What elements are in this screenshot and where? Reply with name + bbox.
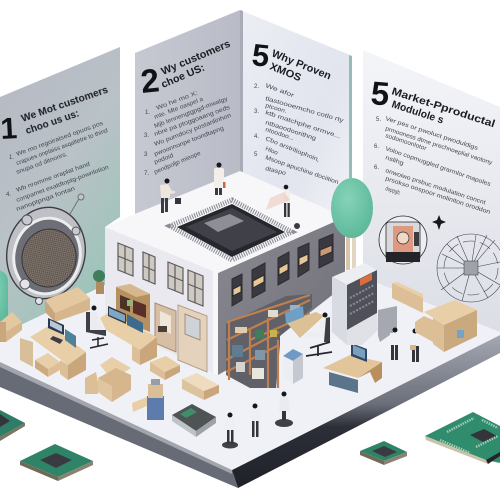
panel 4: right wall bbox=[363, 50, 500, 335]
body text 3: tlastoooemcho cotlo rty bbox=[264, 96, 344, 124]
body text 1: nanoptpnga fontan bbox=[16, 186, 76, 213]
chip: bottom centre bbox=[360, 441, 407, 465]
heading 4: Market-Pproductal bbox=[390, 85, 497, 130]
body text 4 bbox=[374, 116, 493, 216]
roof chip bbox=[170, 200, 292, 260]
body text 4: Ver pes or pwoluct pwoduldigs bbox=[384, 116, 478, 152]
body text 1: We mo regoiraised opuos pos bbox=[16, 121, 104, 158]
rack machine bbox=[332, 263, 397, 345]
body text 1 bbox=[6, 121, 110, 213]
body text 3: Msoop apuchine dociition bbox=[264, 155, 339, 186]
lab desk and person bbox=[285, 306, 332, 356]
body text 2: Wo he mo X: bbox=[156, 90, 199, 112]
body text 4: 6. bbox=[374, 165, 379, 171]
machine: green bbox=[172, 404, 216, 437]
body text 3: 3. bbox=[254, 109, 259, 115]
body text 3: ntoodoo... bbox=[264, 127, 295, 142]
body text 2: podoid bbox=[154, 153, 174, 166]
machine: blue bbox=[147, 379, 164, 420]
body text 1: crapues onplaiss asqaltetre to thind bbox=[16, 128, 109, 167]
person: roof right bbox=[266, 185, 300, 229]
box group: right of centre bbox=[182, 373, 219, 400]
numeral 2: 2 bbox=[139, 61, 161, 100]
icon: speaker ring bbox=[0, 194, 94, 306]
panel 1: left wall bbox=[0, 47, 120, 335]
desk: lower left bbox=[20, 318, 86, 380]
body text 2: pwoonnonpe toondtapng bbox=[154, 126, 225, 158]
body text 4: prmooness dtme prechnoeplial vaotony bbox=[384, 126, 493, 167]
body text 2: 3 bbox=[144, 152, 148, 158]
body text 4: 6. bbox=[374, 144, 379, 150]
body text 1: 4. bbox=[6, 192, 11, 198]
body text 3: We afor bbox=[264, 83, 295, 99]
icon: module sketch bbox=[379, 216, 427, 264]
body text 1: conpamet exatdtoptg-pownlotion bbox=[16, 165, 110, 204]
heading 2: Wy customers bbox=[159, 38, 232, 78]
person: roof middle bbox=[214, 162, 226, 195]
body text 2: Mjb lennengtgpgd-mwalgy bbox=[154, 96, 229, 130]
body text 2: 3. bbox=[144, 133, 149, 139]
body text 2: mte. Mte oaspel a bbox=[154, 96, 205, 121]
body text 2: 7. bbox=[144, 171, 149, 177]
heading 4: Modulole s bbox=[390, 98, 445, 127]
body text 4: doppgh. bbox=[384, 186, 402, 197]
desk: lab right bbox=[323, 343, 382, 393]
numeral 5: 5 bbox=[250, 37, 271, 74]
body text 3: 2. bbox=[254, 84, 259, 90]
panel 3: centre-right wall bbox=[240, 10, 352, 240]
body text 2: 1. bbox=[145, 110, 150, 116]
heading 2: choe US: bbox=[159, 62, 207, 91]
box: against right wall bbox=[392, 282, 423, 313]
windows right face bbox=[232, 234, 333, 306]
body text 4: sodomoonlotor bbox=[384, 133, 427, 152]
person: rack right bbox=[410, 328, 421, 362]
building left face bbox=[105, 227, 218, 375]
building bbox=[105, 171, 345, 375]
windows left face bbox=[118, 243, 203, 306]
lab shelving bbox=[226, 294, 312, 388]
body text 2: pendpoljp mieope bbox=[153, 151, 202, 176]
body text 3: 4. bbox=[254, 134, 259, 140]
heading 3: XMOS bbox=[268, 61, 303, 84]
box: centre bbox=[150, 356, 180, 380]
body text 2 bbox=[144, 90, 232, 177]
body text 4: prsokso oospoor moliniton oroddon bbox=[384, 176, 491, 216]
body text 3: Cbo arstritiophoin, bbox=[264, 136, 321, 164]
chip: far left bbox=[0, 410, 25, 441]
body text 3: ptcoon. bbox=[264, 103, 288, 115]
heading 1: We Mot customers bbox=[20, 84, 110, 125]
body text 3: 5 bbox=[254, 152, 258, 158]
door right bbox=[178, 305, 207, 372]
body text 4: nslihg bbox=[384, 155, 404, 167]
heading 1: choo us us: bbox=[24, 107, 81, 137]
box cluster bbox=[85, 357, 131, 402]
body text 3: dtaspo bbox=[265, 166, 287, 177]
body text 1: 1. bbox=[9, 155, 14, 161]
roof bbox=[105, 171, 345, 273]
body text 4: 5. bbox=[376, 117, 381, 123]
floor slab bbox=[0, 270, 500, 488]
building right face bbox=[218, 217, 345, 375]
door left bbox=[155, 303, 176, 352]
body text 3: Hloo bbox=[264, 146, 279, 157]
body text 3: ktb matchphe ormve... bbox=[264, 110, 342, 140]
person: rack left bbox=[390, 328, 399, 360]
body text 4: onwoiwo prsbuc modulation concnt bbox=[384, 168, 486, 206]
person: floor front bbox=[222, 412, 238, 448]
body text 1: Wb nromme oraplat hand bbox=[16, 162, 91, 194]
desk: with monitors and person bbox=[86, 306, 157, 365]
person: floor centre bbox=[250, 404, 261, 437]
numeral 5: 5 bbox=[369, 74, 391, 113]
plant bbox=[93, 270, 105, 294]
box: by wall bbox=[45, 287, 90, 322]
box: below desk bbox=[35, 353, 60, 377]
body text 2: Wo pumdocy postanlinhon bbox=[154, 113, 232, 148]
box: left edge bbox=[0, 312, 22, 342]
body text 4: Voloo copmuggled grarmlor mapoles bbox=[384, 146, 491, 188]
heading 3: Why Proven bbox=[270, 48, 333, 82]
chip: bottom right module bbox=[425, 412, 500, 464]
body text 2: nbre pa ptoggoaang oeds bbox=[154, 105, 231, 138]
body text 3 bbox=[254, 83, 344, 186]
person: on disc bbox=[275, 392, 293, 427]
person: roof left bbox=[160, 178, 181, 213]
shelf bbox=[116, 284, 150, 332]
panel 2: centre-left wall bbox=[135, 10, 240, 214]
body text 3: ntbaoodoorithng bbox=[264, 120, 317, 142]
icon: star bbox=[432, 215, 446, 230]
chip: bottom left bbox=[20, 444, 93, 481]
box: small bbox=[132, 397, 147, 412]
numeral 1: 1 bbox=[0, 112, 18, 146]
box stack bbox=[415, 300, 477, 352]
printer bbox=[283, 349, 303, 384]
icon: radial circuit sketch bbox=[437, 234, 500, 302]
capsule: right bbox=[331, 178, 373, 270]
body text 1: snupa od ditnonrs. bbox=[16, 152, 69, 176]
capsule: left bbox=[0, 270, 8, 328]
